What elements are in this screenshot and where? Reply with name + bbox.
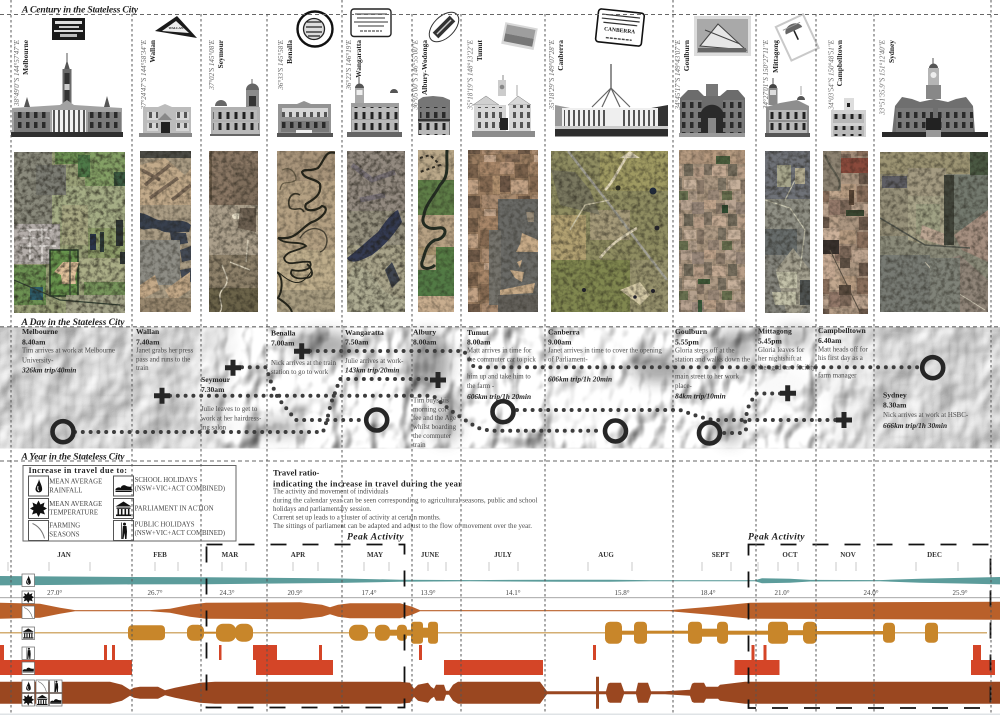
aerial photo: Canberra [551, 151, 668, 312]
journey text: Wallan: Wallan [136, 327, 160, 336]
city label: Seymour: 37°02'S 145°08'E [208, 39, 216, 91]
row icon: farming [22, 606, 34, 618]
journey text: Albury: train [413, 442, 426, 449]
aerial photo: Seymour [209, 151, 258, 312]
marker circle: Melbourne [52, 421, 74, 442]
journey text: Wangaratta: 7.50am [345, 338, 369, 346]
city label: Wangaratta: Wangaratta [354, 40, 363, 78]
journey text: Sydney: Nick arrives at work at HSBC- [883, 412, 969, 419]
marker circle: Sydney [922, 357, 943, 378]
journey text: Wangaratta [345, 328, 404, 374]
journey text: Wallan: pass and runs to the [136, 356, 190, 364]
journey text: Canberra: Canberra [548, 328, 580, 336]
journey text: Albury: 8.00am [413, 338, 437, 346]
dashed peak box: October to December [748, 544, 990, 708]
journey text: Benalla: Nick arrives at the train [271, 360, 337, 367]
journey text: Albury: whilst boarding [413, 424, 457, 431]
city label: Wallan [140, 39, 157, 110]
month labels: MAY [367, 551, 383, 559]
marker circle: Canberra [605, 420, 626, 442]
marker circle: Goulburn [699, 422, 720, 444]
journey text: Sydney [883, 390, 969, 430]
combined icon group [22, 680, 62, 706]
aerial photo: Benalla [277, 151, 335, 312]
dashed peak box: March to May [206, 544, 404, 708]
legend item: temperature: MEAN AVERAGE [49, 501, 102, 508]
city label: Goulburn: 34°45'17"S 149°43'07"E [674, 39, 682, 110]
month labels: NOV [840, 551, 856, 559]
city label: Sydney: Sydney [887, 40, 896, 63]
stamp: Tumut [501, 22, 538, 50]
journey text: Wangaratta: Wangaratta [345, 328, 384, 337]
aerial photo: Mittagong [765, 151, 810, 313]
journey text: Goulburn: Goulburn [675, 327, 708, 336]
band: public holidays [0, 645, 981, 660]
month labels: APR [291, 551, 306, 559]
city label: Benalla [277, 39, 294, 91]
heading: A Year in the Stateless City: A Year in the Stateless City [20, 452, 125, 462]
stamp: Wangaratta [351, 9, 391, 36]
journey text: Goulburn: station and walks down the [675, 356, 750, 364]
aerial photo: Goulburn [679, 150, 745, 312]
month tick marks [8, 562, 958, 571]
journey text: Albury: the commuter [413, 433, 452, 440]
route dots: Seymour to Wangaratta [242, 367, 363, 420]
marker circle: Wangaratta [366, 410, 387, 430]
journey text: Seymour: ing salon [201, 424, 227, 432]
row icon: public holidays [22, 647, 34, 660]
legend item: rainfall: RAINFALL [49, 487, 82, 494]
month labels: SEPT [712, 551, 730, 559]
journey text: Tumut: 606km trip/1h 20min [467, 392, 531, 401]
stamp: Albury [424, 7, 464, 47]
journey text: Canberra: Janet arrives in time to cover the opening [548, 348, 662, 354]
journey text: Goulburn [675, 327, 750, 400]
journey text: Tumut: him up and take him to [467, 374, 531, 380]
route dots: Mittagong to Goulburn [722, 394, 780, 433]
temperature readings: 20.9° [287, 589, 303, 597]
stamp: Canberra: CANBERRA [604, 26, 635, 36]
journey text: Wallan: 7.40am [136, 338, 160, 346]
city label: Sydney [878, 39, 896, 116]
marker circle: Tumut [492, 401, 514, 422]
journey text: Wallan [136, 327, 194, 372]
legend item: temperature: TEMPERATURE [49, 510, 98, 516]
aerial photo: Wangaratta [347, 151, 405, 312]
journey text: Melbourne: Melbourne [22, 327, 58, 336]
terrain hillshade band [0, 327, 1000, 448]
city label: Wallan: 37°24'47"S 144°58'34"E [140, 39, 148, 110]
journey text: Benalla [271, 328, 337, 376]
city label: Wangaratta: 36°22'S 146°19'E [345, 39, 353, 91]
journey text: Campbelltown: Campbelltown [818, 326, 866, 335]
route dots: Benalla to Sydney [310, 351, 919, 367]
temperature readings: 24.3° [219, 589, 235, 597]
text block: Travel ratio: Travel ratio- [273, 468, 320, 478]
city label: Benalla: 36°33'S 145°58'E [277, 39, 285, 91]
journey text: Wangaratta: 143km trip/20min [345, 366, 399, 374]
city label: Melbourne coordinates and name: Melbourne [21, 39, 30, 75]
journey text: Canberra: of Parliament- [548, 356, 588, 364]
journey text: Campbelltown: 6.40am [818, 336, 842, 345]
journey text: Mittagong: her nightshift at [758, 356, 802, 362]
band: parliament in action [0, 622, 987, 644]
temperature readings: 18.4° [700, 589, 716, 597]
marker plus: Mittagong [780, 385, 796, 401]
aerial photo: Sydney [880, 152, 988, 312]
legend item: rainfall [28, 476, 102, 496]
month labels: FEB [153, 551, 167, 559]
journey text: Canberra: 9.00am [548, 338, 572, 346]
journey text: Seymour: Seymour [201, 375, 231, 384]
journey text: Mittagong: Gloria leaves for [758, 347, 805, 354]
journey text: Melbourne: Tim arrives at work at Melbourne [22, 348, 115, 354]
building: Seymour [210, 79, 260, 136]
city label: Albury-Wodonga [412, 39, 429, 110]
building: Parliament House, Canberra [555, 64, 668, 136]
journey text: Seymour: 7.30am [201, 385, 225, 394]
legend item: public holidays [114, 520, 225, 540]
marker plus: Campbelltown [836, 412, 852, 428]
city label: Sydney: 33°51'35.9"S 151°12'40"E [878, 39, 886, 116]
route dots: Melbourne to Albury [75, 379, 430, 432]
city label: Mittagong [762, 39, 780, 110]
journey text: Albury [413, 328, 457, 449]
city label: Benalla: Benalla [285, 40, 294, 64]
label: Peak Activity (spring): Peak Activity [748, 532, 805, 542]
journey text: Albury: Tim buys his [413, 398, 449, 404]
temperature readings: 26.7° [147, 589, 163, 597]
city label: Mittagong: 34°27'01"S 150°27'11"E [762, 39, 770, 110]
stamp: Goulburn [694, 16, 751, 56]
text block: Travel ratio: indicating the increase in travel during the year [273, 478, 462, 488]
building: Wangaratta [347, 77, 402, 137]
text block: Travel ratio [273, 468, 538, 530]
marker plus: Wallan [154, 388, 170, 404]
legend title: Increase in travel due to: [28, 466, 127, 475]
month labels: MAR [222, 551, 239, 559]
journey text: Tumut: the farm - [467, 383, 495, 390]
building: Goulburn [679, 84, 745, 137]
legend item: parliament in action [114, 498, 214, 518]
temperature readings: 14.1° [505, 589, 521, 597]
journey text: Goulburn: place- [675, 383, 693, 390]
city label: Campbelltown: 34°03'54"S 150°48'51"E [828, 39, 836, 110]
legend item: school holidays: SCHOOL HOLIDAYS [135, 477, 198, 484]
month labels: JULY [494, 551, 512, 559]
city label: Melbourne coordinates and name: 38°49'0"S 144°57'47"E [13, 39, 21, 107]
city label: Tumut: 35°18'19"S 148°13'22"E [466, 39, 474, 110]
journey text: Campbelltown [818, 326, 869, 380]
city label: Mittagong: Mittagong [771, 40, 780, 73]
building: Benalla [277, 101, 333, 137]
city label: Tumut [466, 39, 484, 110]
city label: Canberra [548, 39, 565, 110]
marker plus: Albury [430, 372, 446, 388]
building: Wallan [139, 104, 192, 137]
journey text: Wallan: Janet grabs her press [136, 348, 194, 354]
building: Mittagong [765, 78, 810, 137]
journey text: Tumut: Matt arrives in time for [467, 348, 532, 354]
building: Tumut [472, 75, 535, 137]
stamp: Wallan [155, 16, 197, 38]
building: Albury [418, 96, 450, 135]
city label: Wallan: Wallan [148, 40, 157, 63]
city label: Tumut: Tumut [475, 39, 484, 61]
journey text: Albury: morning cof- [413, 406, 450, 414]
legend item: parliament in action: PARLIAMENT IN ACTION [135, 506, 214, 512]
journey text: Seymour: work at her hairdress- [201, 416, 262, 422]
city label: Campbelltown: Campbelltown [835, 40, 844, 86]
journey text: Mittagong: Mittagong [758, 326, 792, 336]
month labels: DEC [927, 551, 942, 559]
heading: A Day in the Stateless City: A Day in the Stateless City [20, 317, 125, 328]
legend item: farming seasons: FARMING [49, 522, 80, 530]
journey text: Tumut: Tumut [467, 328, 489, 337]
journey text: Melbourne [21, 327, 115, 374]
legend item: school holidays: (NSW+VIC+ACT COMBINED) [135, 486, 225, 493]
journey text: Albury: Albury [413, 328, 436, 336]
temperature readings: 21.0° [774, 589, 790, 597]
journey text: Melbourne: 326km trip/40min [21, 366, 76, 374]
stamp: Wallan: WALLAN [169, 26, 184, 30]
aerial photo: Albury [418, 150, 454, 312]
journey text: Tumut: the commuter car to pick [467, 356, 536, 364]
legend item: farming seasons [28, 520, 80, 540]
legend item: rainfall: MEAN AVERAGE [49, 478, 102, 486]
city label: Campbelltown [828, 39, 844, 110]
month labels: OCT [782, 551, 798, 559]
journey text: Tumut: 8.00am [467, 338, 491, 346]
marker plus: Benalla [294, 343, 310, 359]
legend item: school holidays [114, 476, 225, 496]
stamp: Mittagong [776, 14, 819, 61]
city label: Wangaratta [345, 39, 363, 91]
building: Sydney Town Hall [882, 58, 988, 137]
band: rainfall [0, 576, 1000, 585]
journey text: Goulburn: main street to her work [675, 374, 739, 380]
stamp: Melbourne [52, 18, 85, 40]
building: Campbelltown [831, 98, 866, 137]
month labels: JUNE [421, 551, 439, 559]
city label: Albury-Wodonga: 36°05'00"S 146°55'00"E [412, 39, 420, 110]
aerial photo: Tumut [468, 150, 538, 312]
text block: Travel ratio: The activity and movement of individuals [273, 488, 389, 496]
journey text: Canberra [548, 328, 662, 384]
temperature readings: 24.0° [863, 589, 879, 597]
city label: Goulburn: Goulburn [682, 40, 691, 71]
journey text: Goulburn: Gloria steps off at the [675, 348, 735, 354]
row icon: school holidays [22, 662, 34, 674]
city label: Melbourne coordinates and name [13, 39, 30, 107]
journey text: Campbelltown: Matt heads off for [818, 346, 869, 354]
temperature readings [0, 589, 1000, 598]
temperature readings: 13.9° [420, 589, 436, 597]
band: overall travel ratio [0, 677, 1000, 709]
legend item: public holidays: PUBLIC HOLIDAYS [135, 521, 195, 528]
journey text: Goulburn: 84km trip/10min [675, 392, 726, 400]
temperature readings: 17.4° [361, 589, 377, 597]
journey text: Campbelltown: farm manager [818, 372, 857, 380]
journey text: Goulburn: 5.55pm [675, 338, 700, 346]
stamp: Benalla [298, 12, 332, 46]
legend item: public holidays: (NSW+VIC+ACT COMBINED) [135, 530, 225, 537]
city label: Seymour [208, 39, 225, 91]
panel: legend [23, 466, 236, 541]
journey text: Wangaratta: Julie arrives at work- [345, 358, 404, 365]
journey text: Campbelltown: his first day as a [818, 355, 863, 362]
journey text: Mittagong: 5.45pm [758, 336, 783, 346]
month labels [57, 551, 942, 559]
row icon: parliament [22, 627, 34, 640]
journey text: Melbourne: University- [22, 358, 54, 364]
journey text: Benalla: station to go to work [271, 369, 329, 376]
route dots: Wallan to Canberra [170, 396, 603, 431]
aerial photo: Melbourne [14, 152, 125, 313]
city label: Goulburn [674, 39, 691, 110]
journey text: Albury: fee and the Age [413, 415, 456, 422]
building: Melbourne [11, 53, 123, 137]
text block: Travel ratio: during the calendar year can be seen corresponding to agricultural seasons, public and school [273, 497, 538, 504]
text block: Travel ratio: holidays and parliamentary session. [273, 506, 372, 513]
legend item: temperature [28, 498, 102, 518]
city label: Seymour: Seymour [216, 39, 225, 68]
month labels: JAN [57, 551, 71, 559]
aerial photo: Campbelltown [823, 151, 868, 314]
temperature readings: 25.9° [952, 589, 968, 597]
marker plus: Seymour [225, 360, 241, 376]
row icon: rainfall [22, 574, 34, 586]
heading: A Century in the Stateless City: A Century in the Stateless City [21, 4, 139, 16]
journey text: Tumut [467, 328, 536, 401]
journey text: Sydney: Sydney [883, 390, 907, 400]
city label: Albury-Wodonga: Albury-Wodonga [420, 40, 429, 95]
stamp: Canberra [595, 9, 645, 46]
journey text: Seymour [201, 375, 262, 432]
journey text: Benalla: 7.00am [271, 338, 295, 348]
journey text: Wallan: train [136, 365, 149, 372]
text block: Travel ratio: The sittings of parliament can be adapted and adjust to the flow of movement over the year. [273, 523, 532, 530]
journey text: Sydney: 666km trip/1h 30min [883, 421, 947, 430]
temperature readings: 27.0° [47, 589, 62, 597]
journey text: Sydney: 8.30am [883, 400, 907, 410]
journey text: Mittagong [758, 326, 816, 372]
journey text: Canberra: 606km trip/1h 20min [548, 374, 612, 384]
city label: Canberra: Canberra [556, 40, 565, 71]
month labels: AUG [598, 551, 614, 559]
band: school holidays [0, 660, 995, 675]
text block: Travel ratio: Current set up leads to a cluster of activity at certain months. [273, 514, 441, 521]
journey text: Mittagong: the aged care facility [758, 364, 816, 372]
legend item: farming seasons: SEASONS [49, 531, 80, 538]
journey text: Melbourne: 8.40am [22, 338, 46, 346]
label: Peak Activity (autumn): Peak Activity [347, 532, 404, 542]
journey text: Benalla: Benalla [271, 328, 296, 338]
band: farming seasons [0, 602, 1000, 620]
aerial photo: Wallan [140, 151, 191, 312]
temperature readings: 15.8° [614, 589, 630, 597]
row icon: temperature [22, 591, 34, 604]
route dots: Tumut to Campbelltown [517, 410, 836, 420]
journey text: Seymour: Julie leaves to get to [201, 406, 258, 413]
city label: Canberra: 35°18'29"S 149°07'28"E [548, 39, 556, 110]
